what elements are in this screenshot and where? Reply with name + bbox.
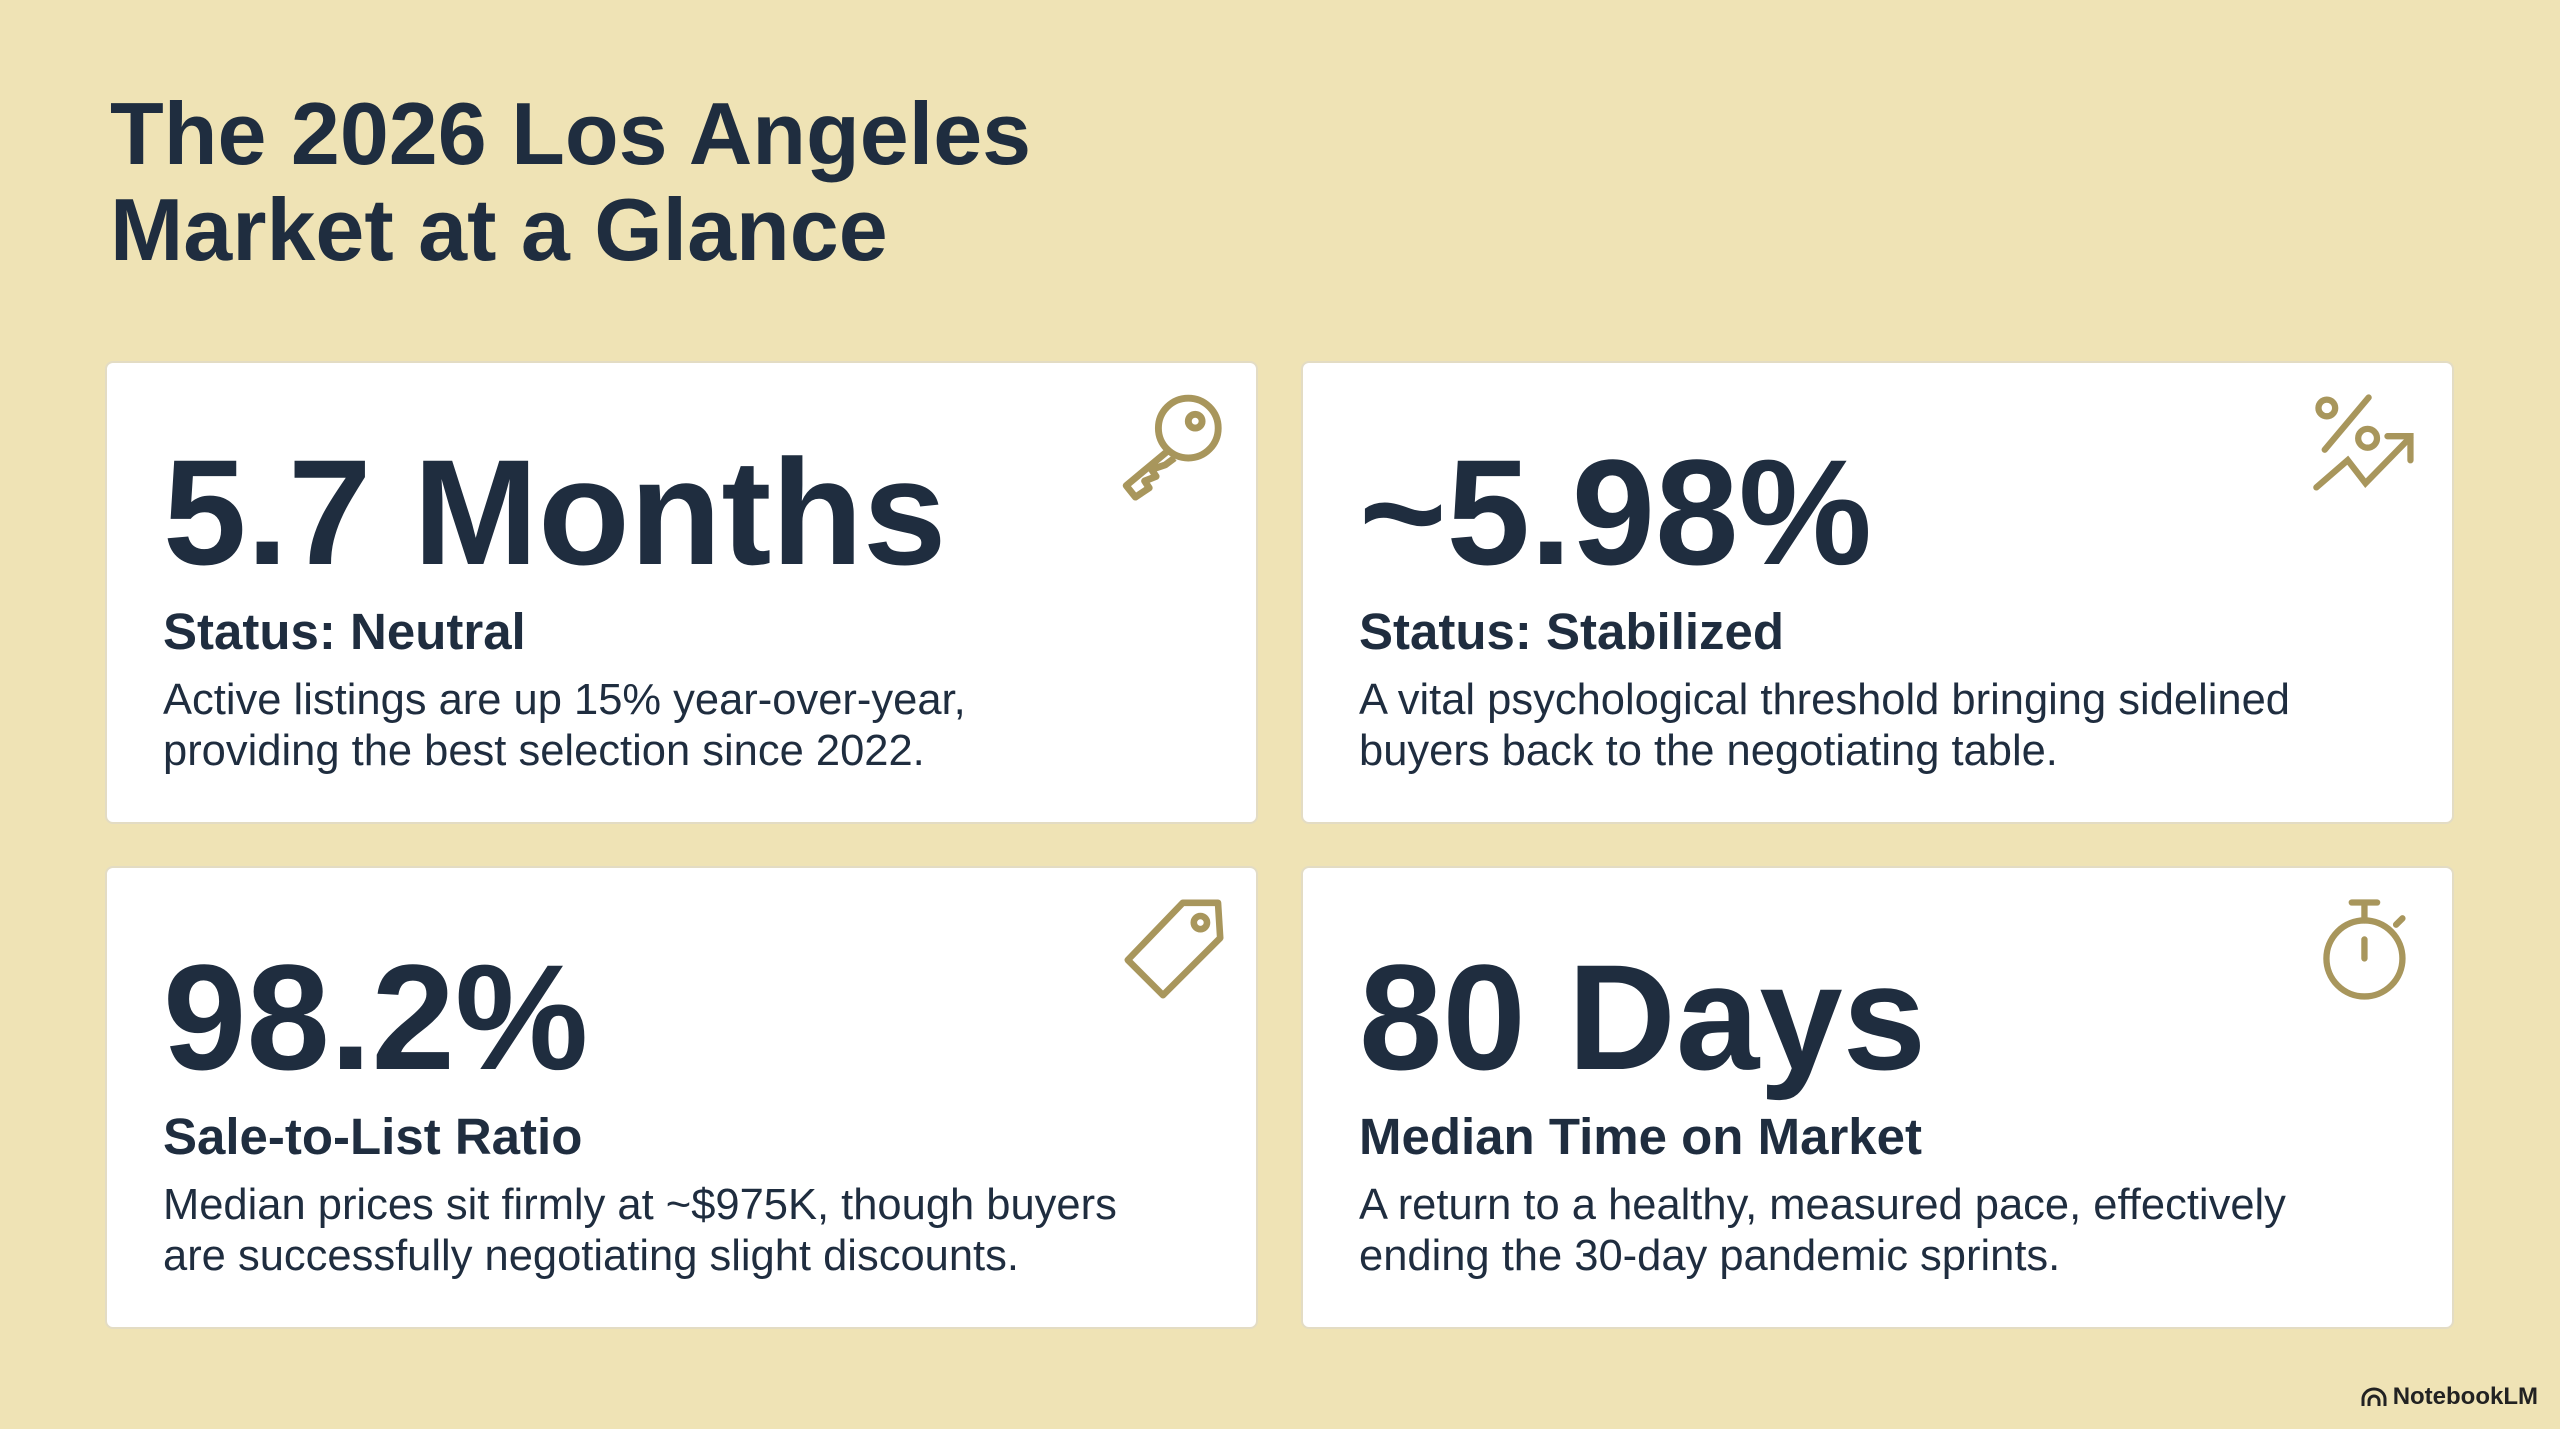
status: stabilized: Status: Stabilized [1359,603,1784,660]
panel: days on market [1301,866,2454,1329]
big number: days: 80 Days [1359,933,1926,1101]
big number: rate: ~5.98% [1359,428,1872,596]
body text: pace [1359,1181,2286,1280]
body text: threshold: A vital psychological threshold bringing sidelined [1359,676,2290,724]
big number: ratio: 98.2% [163,933,588,1101]
logo: NotebookLM: NotebookLM [2393,1383,2538,1410]
big number: months: 5.7 Months [163,428,946,596]
status: neutral: Status: Neutral [163,603,526,660]
body text: listings: Active listings are up 15% year-over-year, [163,676,966,724]
label: median time: Median Time on Market [1359,1108,1922,1165]
body text: pace: A return to a healthy, measured pace, effectively [1359,1181,2286,1229]
body text: threshold: buyers back to the negotiating table. [1359,727,2058,775]
body text: prices: Median prices sit firmly at ~$975K, though buyers [163,1181,1117,1229]
body text: prices: are successfully negotiating slight discounts. [163,1232,1019,1280]
panel: sale to list [105,866,1258,1329]
title: Market at a Glance [110,180,888,279]
body text: listings [163,676,966,775]
body text: prices [163,1181,1117,1280]
icon: key [1122,394,1222,500]
panel: inventory [105,361,1258,824]
title [110,84,1031,279]
panel: rates [1301,361,2454,824]
label: sale-to-list: Sale-to-List Ratio [163,1108,582,1165]
icon: price tag [1124,900,1224,998]
title: The 2026 Los Angeles [110,84,1031,183]
body text: listings: providing the best selection since 2022. [163,727,925,775]
icon: percent trend [2313,394,2414,490]
body text: threshold [1359,676,2290,775]
body text: pace: ending the 30-day pandemic sprints. [1359,1232,2060,1280]
icon: stopwatch [2323,899,2406,1000]
